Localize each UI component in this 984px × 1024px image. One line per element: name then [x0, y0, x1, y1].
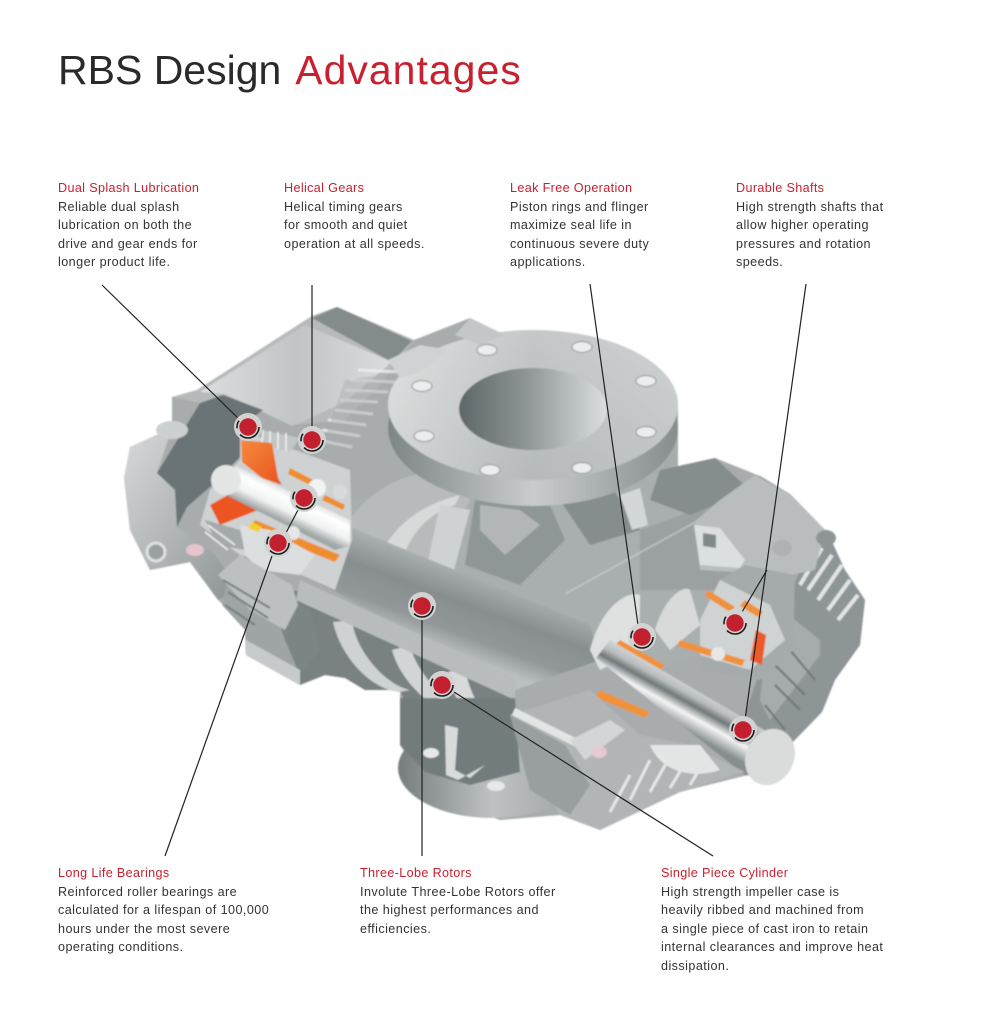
left cavity dark: [157, 395, 263, 527]
text: Leak Free Operation: Leak Free Operation: [510, 181, 632, 195]
text: Long Life Bearings: Long Life Bearings: [58, 866, 170, 880]
text: Three-Lobe Rotors: Involute Three-Lobe Rotors offer: [360, 885, 556, 899]
text: Three-Lobe Rotors: the highest performances and: [360, 903, 539, 917]
text: Three-Lobe Rotors: Three-Lobe Rotors: [360, 866, 472, 880]
text: Durable Shafts: allow higher operating: [736, 218, 869, 232]
upper right casing: [640, 490, 790, 590]
silhouette: [124, 307, 865, 830]
callout: single piece cylinder marker: [428, 671, 456, 699]
top clamp: [455, 318, 505, 345]
text: Dual Splash Lubrication: Reliable dual splash: [58, 200, 180, 214]
text: Leak Free Operation: applications.: [510, 255, 586, 269]
flange bore: [459, 368, 607, 450]
text: Long Life Bearings: hours under the most severe: [58, 922, 230, 936]
text: Dual Splash Lubrication: drive and gear ends for: [58, 237, 198, 251]
text: Durable Shafts: High strength shafts that: [736, 200, 884, 214]
bottom flange: [398, 718, 586, 818]
text: Helical Gears: [284, 181, 425, 251]
text: Dual Splash Lubrication: longer product life.: [58, 255, 170, 269]
left orange parts: [241, 440, 282, 485]
text: Durable Shafts: pressures and rotation: [736, 237, 871, 251]
left shaft: [225, 466, 350, 550]
text: Helical Gears: Helical Gears: [284, 181, 364, 195]
title: RBS Design Advantages: [58, 47, 522, 93]
right upper casing: [694, 475, 825, 575]
left cutaway interior: [200, 430, 352, 590]
text: Single Piece Cylinder: dissipation.: [661, 959, 729, 973]
text: Single Piece Cylinder: High strength impeller case is: [661, 885, 839, 899]
text: Helical Gears: for smooth and quiet: [284, 218, 408, 232]
right orange bearings: [595, 590, 763, 718]
flange neck and ribs: [340, 470, 790, 680]
callout: shaft upper marker: [721, 609, 749, 637]
left foot bracket: [222, 575, 300, 685]
flange bolt holes: [412, 342, 656, 476]
lower rib skirt: [245, 590, 510, 780]
text: Three-Lobe Rotors: [360, 866, 556, 936]
text: Single Piece Cylinder: Single Piece Cylinder: [661, 866, 788, 880]
callout: long life bearings marker: [264, 529, 292, 557]
text: Single Piece Cylinder: heavily ribbed and machined from: [661, 903, 864, 917]
text: Long Life Bearings: Reinforced roller bearings are: [58, 885, 237, 899]
gear teeth: [318, 370, 400, 447]
leader lines: [102, 284, 806, 856]
callout: shaft lower marker: [729, 716, 757, 744]
text: Helical Gears: operation at all speeds.: [284, 237, 425, 251]
text: Dual Splash Lubrication: Dual Splash Lubrication: [58, 181, 199, 195]
text: Leak Free Operation: continuous severe duty: [510, 237, 649, 251]
left end casing: [124, 428, 240, 600]
text: Long Life Bearings: [58, 866, 269, 954]
text: Durable Shafts: Durable Shafts: [736, 181, 824, 195]
right end fins: [720, 476, 865, 772]
left mounting block: [218, 555, 298, 630]
cylinder rim: [296, 580, 515, 700]
text: Single Piece Cylinder: internal clearances and improve heat: [661, 940, 883, 954]
gear cover top: [173, 307, 414, 425]
text: Three-Lobe Rotors: efficiencies.: [360, 922, 431, 936]
text: Durable Shafts: [736, 181, 884, 269]
callout: three-lobe rotors marker: [408, 592, 436, 620]
callout: helical gears marker: [298, 426, 326, 454]
text: Durable Shafts: speeds.: [736, 255, 783, 269]
text: Single Piece Cylinder: [661, 866, 883, 973]
right shaft: [596, 640, 778, 778]
callout: leak free marker: [628, 623, 656, 651]
right bottom gear: [510, 690, 745, 830]
text: Dual Splash Lubrication: [58, 181, 199, 269]
left cooling fins: [262, 430, 300, 452]
text: Leak Free Operation: Piston rings and flinger: [510, 200, 649, 214]
text: Dual Splash Lubrication: lubrication on both the: [58, 218, 192, 232]
text: Long Life Bearings: operating conditions.: [58, 940, 183, 954]
right cavity: [700, 565, 795, 680]
flange: [388, 350, 678, 506]
callout: upper bearing marker: [290, 484, 318, 512]
blower body: [124, 307, 865, 830]
text: Single Piece Cylinder: a single piece of cast iron to retain: [661, 922, 868, 936]
text: Long Life Bearings: calculated for a lifespan of 100,000: [58, 903, 269, 917]
main cylinder: [310, 525, 600, 690]
text: Leak Free Operation: [510, 181, 649, 269]
callout: lubrication marker: [234, 413, 262, 441]
text: Helical Gears: Helical timing gears: [284, 200, 403, 214]
text: Leak Free Operation: maximize seal life in: [510, 218, 632, 232]
left lower bearing: [240, 525, 315, 575]
left bolt: [186, 544, 204, 556]
